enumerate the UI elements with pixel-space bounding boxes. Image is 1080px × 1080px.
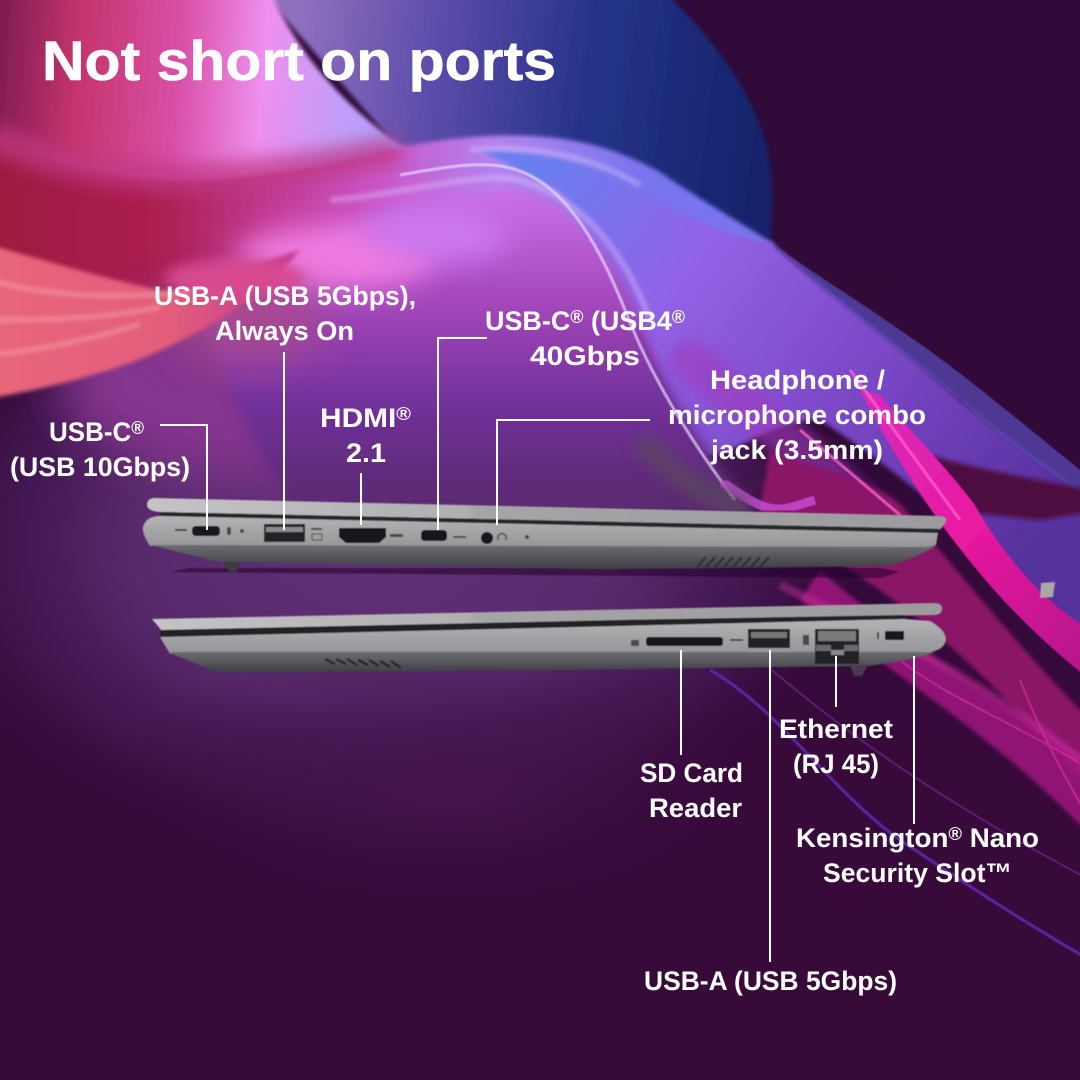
port icons and indicators bbox=[175, 527, 529, 540]
label: headphone microphone jack: microphone combo bbox=[668, 400, 926, 430]
lower laptop hinge gap bbox=[160, 615, 905, 637]
label: USB-C USB4: (USB4 bbox=[583, 306, 672, 336]
rubber foot bbox=[850, 665, 868, 676]
label: Kensington lock: Nano bbox=[962, 823, 1039, 853]
port: USB-C 10Gbps bbox=[192, 526, 220, 536]
port: USB-C USB4 bbox=[421, 530, 447, 541]
shadow under upper laptop bbox=[170, 568, 900, 578]
label: USB-C USB4: USB-C bbox=[485, 306, 570, 336]
port: USB-A bbox=[748, 629, 790, 648]
speaker grille bbox=[697, 557, 769, 567]
label: Ethernet: Ethernet bbox=[779, 714, 893, 744]
port: SD card slot bbox=[646, 637, 723, 646]
speaker grille bbox=[325, 659, 401, 668]
label: Kensington lock: Kensington bbox=[796, 823, 944, 853]
label: USB-C 10Gbps: ® bbox=[131, 418, 144, 438]
upper laptop hinge gap bbox=[160, 512, 941, 533]
label: USB-A 5Gbps: USB-A (USB 5Gbps) bbox=[644, 966, 897, 996]
title: Not short on ports bbox=[42, 29, 556, 92]
lower laptop base bbox=[160, 619, 946, 654]
label: USB-C USB4: ® bbox=[672, 307, 685, 327]
small stray grey glint bbox=[1040, 582, 1055, 598]
label: headphone microphone jack: jack (3.5mm) bbox=[710, 435, 883, 465]
label: USB-C USB4 bbox=[485, 306, 685, 371]
label: headphone microphone jack bbox=[668, 365, 926, 465]
label: USB-C 10Gbps: USB-C bbox=[49, 417, 134, 447]
label: Kensington lock: ® bbox=[948, 824, 962, 844]
lower laptop lid bbox=[152, 603, 942, 631]
label: USB-C USB4: 40Gbps bbox=[530, 341, 640, 371]
label: USB-C 10Gbps: (USB 10Gbps) bbox=[10, 452, 190, 482]
port: Kensington lock slot bbox=[885, 631, 904, 640]
label: SD card reader bbox=[640, 758, 743, 823]
laptop: left side view bbox=[143, 498, 946, 578]
label: headphone microphone jack: Headphone / bbox=[710, 365, 886, 395]
label: HDMI bbox=[320, 403, 411, 468]
label: USB-C 10Gbps bbox=[10, 417, 190, 482]
port: Ethernet RJ45 bbox=[815, 629, 859, 664]
port icons bbox=[631, 632, 879, 646]
label: Kensington lock bbox=[796, 823, 1039, 888]
label: SD card reader: Reader bbox=[649, 793, 743, 823]
upper laptop lid bbox=[147, 498, 946, 529]
label: Ethernet bbox=[779, 714, 893, 779]
upper laptop base bbox=[143, 516, 938, 548]
rubber foot bbox=[224, 562, 240, 572]
label: Ethernet: (RJ 45) bbox=[793, 749, 879, 779]
leader lines bbox=[160, 338, 914, 962]
lower laptop lower body bbox=[168, 652, 935, 672]
label: HDMI: HDMI bbox=[320, 403, 389, 433]
label: SD card reader: SD Card bbox=[640, 758, 743, 788]
port: audio jack bbox=[481, 532, 493, 544]
laptop: right side view bbox=[152, 603, 946, 676]
label: USB-C USB4: ® bbox=[570, 307, 583, 327]
port: HDMI bbox=[339, 528, 386, 543]
label: USB-A Always On: Always On bbox=[215, 316, 354, 346]
label: Kensington lock: Security Slot™ bbox=[823, 858, 1012, 888]
label: USB-A Always On bbox=[154, 281, 416, 346]
upper laptop lower body bbox=[150, 545, 936, 569]
label: HDMI: ® bbox=[396, 404, 411, 424]
port: USB-A bbox=[264, 524, 305, 542]
label: USB-A Always On: USB-A (USB 5Gbps), bbox=[154, 281, 416, 311]
label: HDMI: 2.1 bbox=[346, 438, 386, 468]
